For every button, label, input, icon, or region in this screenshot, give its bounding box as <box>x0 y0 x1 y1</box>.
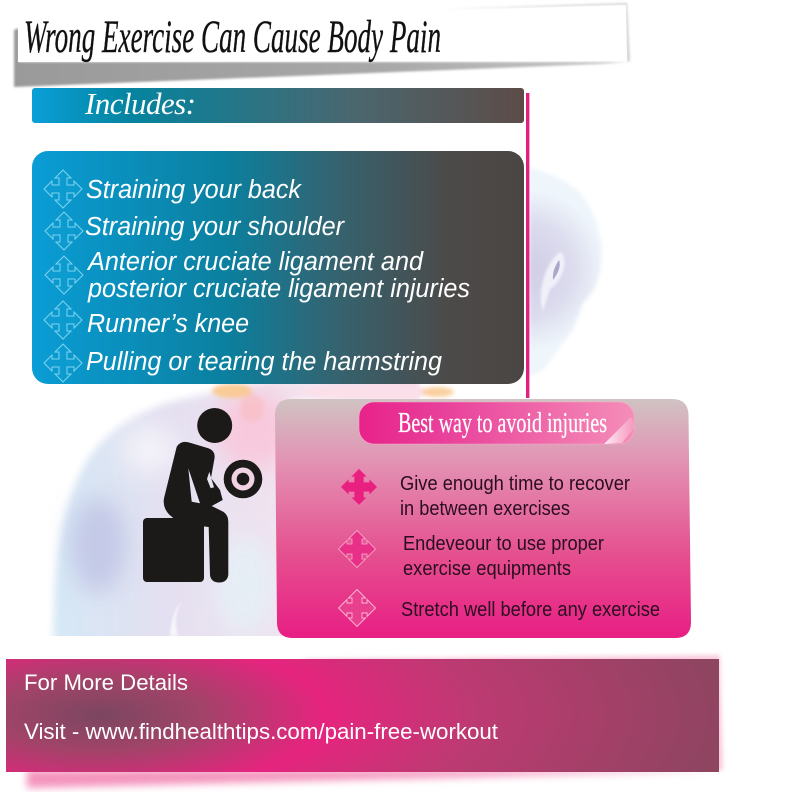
item: cruciate ligament injuries: posterior cruciate ligament injuries <box>87 275 470 303</box>
panel: types of injury <box>32 151 524 384</box>
item: pulling or tearing the harmstring: Pulling or tearing the harmstring <box>86 348 442 376</box>
title banner <box>14 3 630 87</box>
heading pill: Best way to avoid injuries <box>398 407 607 439</box>
item: straining your shoulder: Straining your shoulder <box>85 213 345 241</box>
item: cruciate ligament injuries: Anterior cruciate ligament and <box>86 248 424 276</box>
item: pulling or tearing the harmstring <box>44 344 442 382</box>
footer banner <box>6 655 723 788</box>
tip: stretch well <box>338 590 660 626</box>
tip: recover between exercises: Give enough time to recover <box>400 472 630 495</box>
banner shadow <box>14 28 628 87</box>
panel: best way to avoid injuries <box>275 399 691 638</box>
tip: proper equipment: Endeveour to use proper <box>403 532 604 555</box>
footer text: For More Details <box>24 670 188 695</box>
title: Wrong Exercise Can Cause Body Pain <box>24 11 441 63</box>
tip: stretch well: Stretch well before any exercise <box>401 598 660 621</box>
heading pill <box>359 402 634 444</box>
heading text: Includes: <box>84 86 196 121</box>
tip: recover between exercises: in between exercises <box>400 497 570 520</box>
tip: proper equipment <box>338 530 604 580</box>
tip: recover between exercises <box>340 468 630 520</box>
spine highlight <box>212 384 454 422</box>
item: runner's knee: Runner’s knee <box>87 310 249 338</box>
tip: proper equipment: exercise equipments <box>403 557 571 580</box>
footer banner: Visit - www.findhealthtips.com/pain-free-workout <box>24 719 499 744</box>
background illustration: human shoulder and head <box>54 167 602 660</box>
shoulder and back <box>54 380 420 660</box>
icon: seated person lifting dumbbell <box>143 408 262 582</box>
head <box>529 167 602 376</box>
item: straining your shoulder <box>45 212 345 250</box>
item: runner's knee <box>44 301 249 339</box>
item: straining your back: Straining your back <box>86 176 302 204</box>
item: cruciate ligament injuries <box>45 248 470 303</box>
heading bar: includes <box>32 86 524 123</box>
footer shadow <box>27 770 720 788</box>
vertical pink divider <box>526 93 529 398</box>
item: straining your back <box>44 170 302 208</box>
